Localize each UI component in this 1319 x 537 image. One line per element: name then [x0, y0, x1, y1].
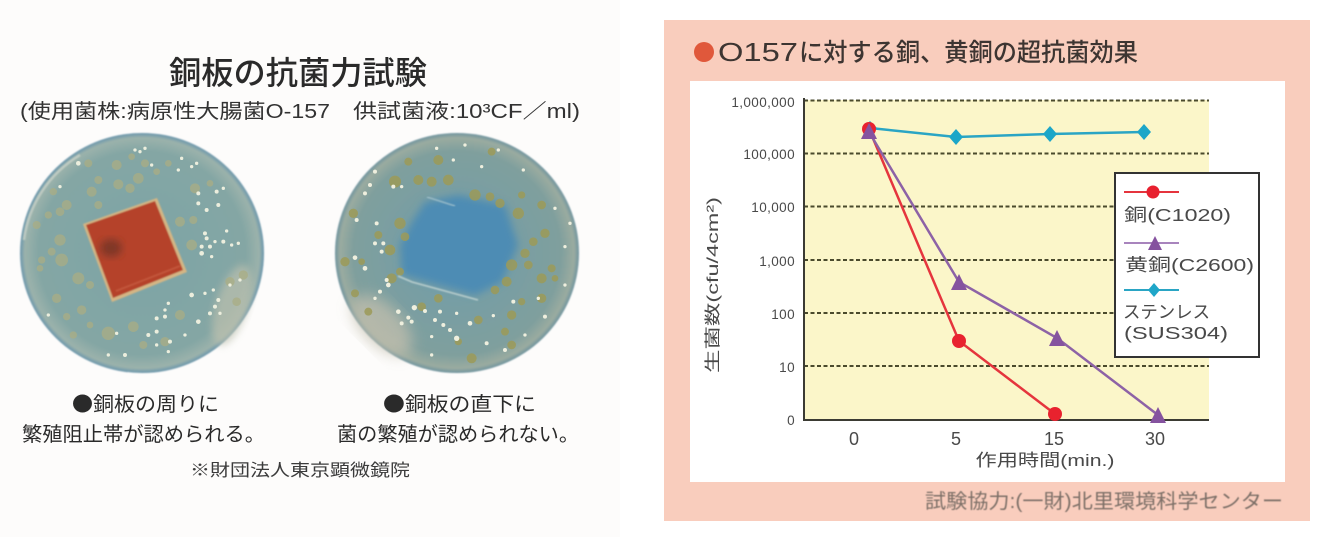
caption: right dish: 菌の繁殖が認められない。: [337, 423, 579, 446]
axes: [804, 98, 1209, 420]
plot area: [804, 100, 1209, 420]
legend: [1115, 173, 1259, 357]
caption: right dish: ●銅板の直下に: [383, 388, 536, 417]
y-axis tick labels: 1,000,000: [731, 95, 795, 110]
chart heading: に対する銅、黄銅の超抗菌効果: [799, 39, 1138, 67]
caption: left dish: [22, 388, 265, 446]
x-axis tick labels: 30: [1145, 429, 1165, 449]
chart heading: [694, 37, 1138, 67]
gridlines: [804, 100, 1209, 366]
credit: 試験協力:(一財)北里環境科学センター: [925, 490, 1283, 513]
petri dish: copper plate on top: [20, 133, 264, 373]
copper plate: [83, 198, 187, 302]
y-axis tick labels: 100,000: [743, 147, 795, 162]
legend: ステンレス: [1123, 302, 1210, 322]
source note: ※財団法人東京顕微鏡院: [190, 461, 410, 480]
title: 銅板の抗菌力試験: [169, 55, 427, 91]
x-axis tick labels: 0: [849, 429, 859, 449]
series: copper C1020: [862, 122, 1062, 421]
series: brass C2600: [861, 123, 1166, 423]
chart heading: O157: [718, 37, 798, 67]
series: stainless: [863, 121, 1151, 145]
x-axis tick labels: 15: [1044, 429, 1064, 449]
y-axis tick labels: 10,000: [751, 200, 795, 215]
y-axis title: 生菌数(cfu/4cm²): [704, 197, 722, 373]
x-axis tick labels: [849, 429, 1165, 449]
x-axis tick labels: 5: [951, 429, 961, 449]
left panel background: [0, 0, 620, 537]
petri dish: inhibition under plate removed: [335, 133, 579, 373]
x-axis title: 作用時間(min.): [976, 451, 1114, 470]
caption: right dish: [337, 388, 579, 446]
caption: left dish: ●銅板の周りに: [72, 388, 219, 417]
y-axis tick labels: 100: [771, 307, 795, 322]
subtitle: test conditions: (使用菌株:病原性大腸菌O-157: [20, 100, 330, 123]
caption: left dish: 繁殖阻止帯が認められる。: [22, 423, 265, 446]
legend: 黄銅(C2600): [1125, 255, 1254, 275]
y-axis tick labels: 1,000: [759, 254, 795, 269]
legend: 銅(C1020): [1124, 205, 1231, 225]
y-axis tick labels: [731, 95, 795, 428]
clear zone: [400, 195, 518, 295]
y-axis tick labels: 10: [779, 360, 795, 375]
subtitle: test conditions: [20, 100, 580, 123]
subtitle: test conditions: 供試菌液:10³CF／ml): [353, 100, 580, 123]
panel: O157 chart: [664, 20, 1310, 521]
legend: (SUS304): [1124, 323, 1228, 343]
y-axis tick labels: 0: [787, 413, 795, 428]
